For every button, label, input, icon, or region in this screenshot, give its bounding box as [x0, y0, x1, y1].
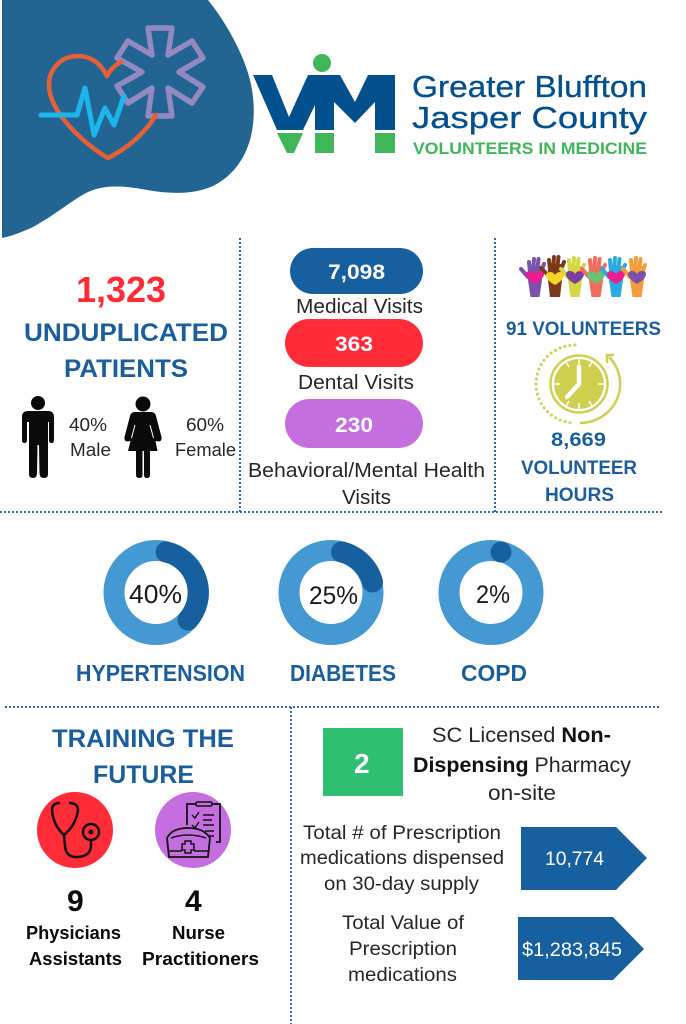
donut: diabetes 25%: 25% — [309, 582, 358, 610]
stat: physician assistants: Assistants — [29, 949, 122, 969]
patient count: 1,323 — [76, 269, 166, 310]
male share: Male — [70, 440, 111, 460]
donut: diabetes 25% — [289, 550, 373, 634]
pill: dental visits: 363 — [335, 333, 373, 356]
heading: training the future — [52, 725, 234, 789]
stat: nurse practitioners: 4 — [185, 885, 202, 918]
icon: male figure — [22, 396, 54, 478]
donut: copd 2%: 2% — [476, 581, 510, 609]
pill: behavioral visits — [285, 399, 423, 448]
prescription value text: Prescription — [349, 938, 457, 960]
pill: medical visits: 7,098 — [328, 261, 385, 284]
icon: nurse cap and clipboard — [155, 792, 231, 868]
icon: heart outline — [49, 56, 156, 158]
panel: unduplicated patients — [22, 269, 236, 478]
label: dental visits: Dental Visits — [298, 372, 414, 394]
stat: nurse practitioners — [142, 885, 259, 969]
arrow: prescriptions dispensed — [521, 827, 647, 890]
icon: stethoscope — [37, 792, 113, 868]
panel: chronic conditions — [76, 542, 533, 686]
header blob with heart and star icon — [2, 0, 254, 238]
blue blob — [2, 0, 254, 238]
stat: physician assistants: Physicians — [26, 923, 121, 943]
icon: clock with arrow — [536, 345, 620, 423]
label: behavioral visits: Behavioral/Mental Health — [248, 460, 485, 482]
label: medical visits: Medical Visits — [296, 296, 423, 318]
green badge — [323, 728, 403, 796]
logo — [253, 54, 648, 158]
male share: 40% — [69, 415, 107, 435]
icon: raised hands with hearts — [521, 257, 646, 297]
volunteer hours: 8,669 — [551, 430, 606, 451]
pharmacy description: SC Licensed Non- — [432, 724, 611, 747]
prescription value text — [342, 912, 465, 986]
heading: training the future: TRAINING THE — [52, 725, 234, 753]
icon: female figure — [124, 396, 162, 478]
panel: volunteers — [506, 257, 661, 506]
pharmacy description: on-site — [488, 782, 556, 805]
pill: behavioral visits: 230 — [335, 414, 373, 437]
arrow: prescriptions dispensed: 10,774 — [545, 849, 604, 870]
stat: nurse practitioners: Nurse — [172, 923, 225, 943]
donut: hypertension 40% — [114, 550, 198, 634]
female share: Female — [175, 440, 236, 460]
logo text — [412, 69, 648, 158]
prescription value text: Total Value of — [342, 912, 465, 934]
panel: training the future — [26, 725, 259, 969]
donut: hypertension 40%: 40% — [129, 579, 182, 609]
volunteers count: 91 VOLUNTEERS — [506, 319, 661, 340]
arrow: prescription value — [518, 917, 644, 980]
prescriptions dispensed text: Total # of Prescription — [303, 822, 501, 844]
heading: unduplicated patients — [24, 319, 228, 383]
prescription value text: medications — [348, 964, 457, 986]
logo text: Jasper County — [412, 100, 648, 135]
female share: 60% — [186, 415, 224, 435]
volunteer hours: HOURS — [545, 485, 614, 506]
pharmacy description: Dispensing Pharmacy — [413, 754, 632, 777]
label: behavioral visits: Visits — [342, 487, 391, 509]
panel: pharmacy — [300, 724, 647, 986]
stat: nurse practitioners: Practitioners — [142, 949, 259, 969]
label: diabetes: DIABETES — [290, 660, 396, 686]
stat: physician assistants: 9 — [67, 885, 84, 918]
pharmacy description — [413, 724, 632, 805]
female share — [175, 415, 236, 460]
logo mark — [253, 54, 395, 153]
logo text: VOLUNTEERS IN MEDICINE — [413, 139, 647, 158]
green badge: 2 — [354, 748, 370, 779]
pill: dental visits — [285, 319, 423, 367]
volunteer hours: VOLUNTEER — [521, 458, 637, 479]
label: behavioral visits — [248, 460, 485, 509]
arrow: prescription value: $1,283,845 — [522, 940, 622, 961]
icon: heartbeat line — [41, 88, 124, 135]
pill: medical visits — [290, 248, 423, 294]
prescriptions dispensed text: medications dispensed — [300, 847, 504, 869]
heading: training the future: FUTURE — [93, 761, 194, 789]
prescriptions dispensed text: on 30-day supply — [324, 873, 479, 895]
label: copd: COPD — [461, 660, 527, 686]
donut: copd 2% — [449, 542, 533, 634]
icon: star of life — [117, 28, 203, 116]
heading: unduplicated patients: PATIENTS — [64, 355, 188, 383]
panel: visits — [248, 248, 485, 509]
volunteer hours — [521, 430, 637, 506]
label: hypertension: HYPERTENSION — [76, 660, 245, 686]
male share — [69, 415, 111, 460]
stat: physician assistants — [26, 885, 122, 969]
prescriptions dispensed text — [300, 822, 504, 895]
heading: unduplicated patients: UNDUPLICATED — [24, 319, 228, 347]
logo text: Greater Bluffton — [412, 69, 647, 104]
